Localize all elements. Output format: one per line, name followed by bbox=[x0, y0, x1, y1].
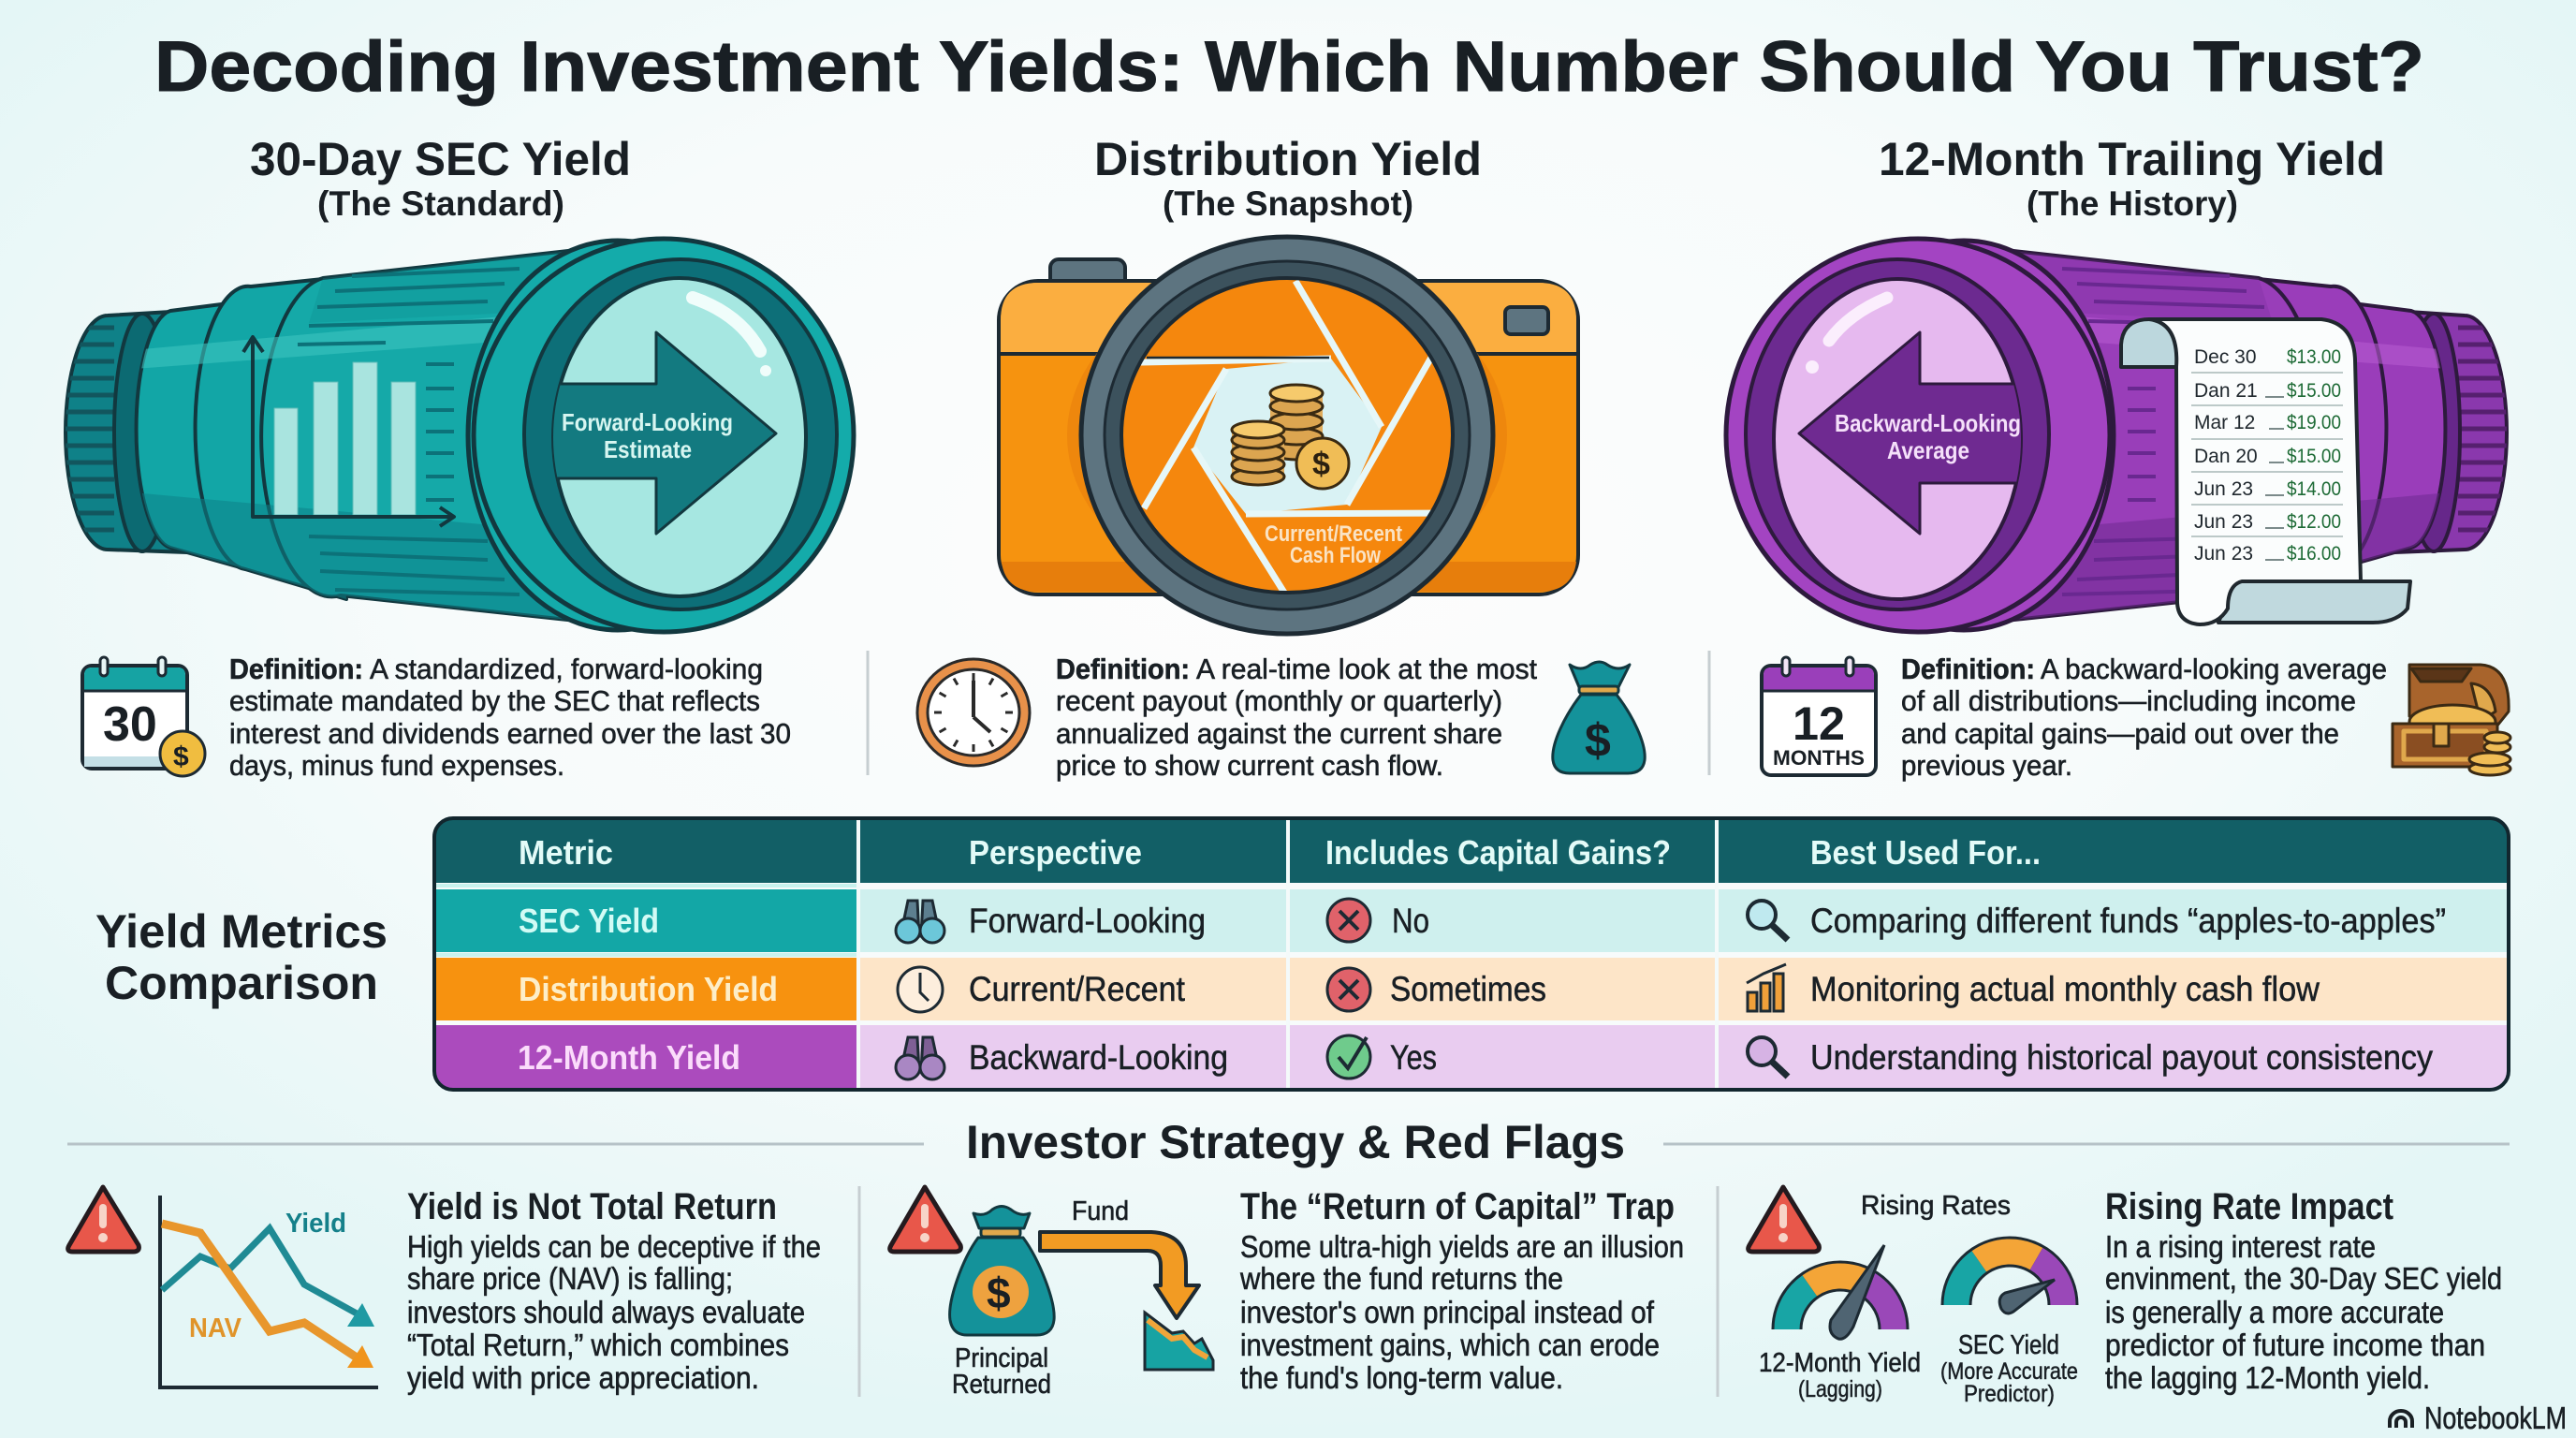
chart: eroding value bbox=[1145, 1313, 1213, 1370]
row: 12-Month Yield: Backward-Looking bbox=[969, 1038, 1228, 1077]
text: 12-month definition bbox=[1901, 653, 2387, 782]
icon: binoculars bbox=[896, 901, 944, 943]
illustration: purple telescope bbox=[1726, 239, 2507, 632]
text: yield is not total return: yield with price appreciation. bbox=[407, 1360, 759, 1395]
illustration: teal telescope bbox=[66, 239, 854, 632]
gauge: SEC yield bbox=[1956, 1252, 2063, 1313]
row: 12-Month Yield: Understanding historical payout consistency bbox=[1810, 1038, 2433, 1077]
chart: yield vs NAV bbox=[160, 1196, 378, 1387]
receipt: $15.00 bbox=[2287, 446, 2341, 467]
heading: yield metrics comparison: Yield Metrics bbox=[95, 905, 388, 958]
heading: 30-Day SEC Yield bbox=[250, 133, 631, 223]
icon: 30 day calendar: 30 bbox=[103, 697, 157, 752]
text: 12-month definition: A backward-looking average bbox=[2041, 653, 2387, 685]
text: rising rate impact: In a rising interest rate bbox=[2105, 1229, 2376, 1264]
bar chart on telescope bbox=[243, 337, 454, 526]
icon: coin stacks bbox=[1232, 385, 1349, 489]
receipt: Dan 20 bbox=[2194, 446, 2258, 467]
strategy 3: rising rate impact: Predictor) bbox=[1964, 1381, 2055, 1407]
icon: warning bbox=[890, 1187, 960, 1252]
text: 12-month definition: and capital gains—paid out over the bbox=[1901, 717, 2339, 750]
table header row: Best Used For... bbox=[1810, 833, 2041, 872]
row: Distribution Yield: Distribution Yield bbox=[519, 970, 778, 1008]
row: SEC Yield: No bbox=[1392, 902, 1429, 940]
strategy 2: return of capital trap: Returned bbox=[952, 1370, 1051, 1400]
text: return of capital: Some ultra-high yields are an illusion bbox=[1240, 1229, 1684, 1264]
icon: no bbox=[1327, 899, 1370, 942]
text: yield is not total return: High yields can be deceptive if the bbox=[407, 1229, 821, 1264]
table header row: Metric bbox=[519, 833, 613, 872]
row: Distribution Yield: Sometimes bbox=[1390, 970, 1546, 1008]
icon: sometimes bbox=[1327, 968, 1370, 1011]
arrow: fund down bbox=[1040, 1232, 1199, 1318]
heading: 30-Day SEC Yield: 30-Day SEC Yield bbox=[250, 133, 631, 185]
icon: 12 months calendar bbox=[1762, 657, 1876, 775]
receipt: Jun 23 bbox=[2194, 511, 2253, 533]
strategy 3: rising rate impact: (More Accurate bbox=[1940, 1358, 2078, 1385]
receipt bbox=[2121, 319, 2410, 624]
heading: 12-Month Trailing Yield bbox=[1879, 133, 2385, 223]
text: 12-month definition: previous year. bbox=[1901, 749, 2072, 782]
text: rising rate impact bbox=[2105, 1186, 2502, 1395]
text: yield is not total return: Yield is Not Total Return bbox=[407, 1186, 777, 1227]
icon: 30 day calendar bbox=[82, 657, 205, 776]
comparison table bbox=[434, 818, 2509, 1090]
chart: yield vs NAV: Yield bbox=[285, 1209, 346, 1239]
row: Distribution Yield: Current/Recent bbox=[969, 970, 1186, 1008]
text: distribution definition bbox=[1056, 653, 1537, 782]
text: distribution definition: A real-time look at the most bbox=[1196, 653, 1537, 685]
illustration: purple telescope: Backward-Looking bbox=[1835, 409, 2021, 437]
text: 12-month definition: of all distributions—including income bbox=[1901, 684, 2356, 717]
table header row: Perspective bbox=[969, 833, 1142, 872]
icon: money bag: $ bbox=[1585, 714, 1611, 767]
icon: warning bbox=[1749, 1187, 1819, 1252]
icon: binoculars purple bbox=[896, 1037, 944, 1079]
icon: 30 day calendar: $ bbox=[173, 741, 189, 772]
text: yield is not total return: share price (NAV) is falling; bbox=[407, 1261, 733, 1296]
receipt: $13.00 bbox=[2287, 346, 2341, 368]
text: 30-day definition: days, minus fund expenses. bbox=[229, 749, 564, 782]
text: 30-day definition: A standardized, forward-looking bbox=[370, 653, 763, 685]
strategy 2: return of capital trap bbox=[890, 1186, 1684, 1400]
strategy 3: rising rate impact: 12-Month Yield bbox=[1759, 1348, 1921, 1378]
icon: magnifier purple bbox=[1748, 1037, 1788, 1077]
icon: warning bbox=[68, 1187, 139, 1252]
text: distribution definition: recent payout (monthly or quarterly) bbox=[1056, 684, 1502, 717]
strategy 2: return of capital trap: Principal bbox=[955, 1343, 1048, 1373]
heading: 30-Day SEC Yield: (The Standard) bbox=[317, 184, 564, 223]
illustration: purple telescope: Average bbox=[1887, 436, 1969, 464]
icon: clock bbox=[917, 659, 1030, 766]
receipt: Mar 12 bbox=[2194, 412, 2255, 433]
text: rising rate impact: predictor of future income than bbox=[2105, 1328, 2485, 1362]
text: 30-day definition: interest and dividends earned over the last 30 bbox=[229, 717, 791, 750]
heading: 12-Month Trailing Yield: 12-Month Trailing Yield bbox=[1879, 133, 2385, 185]
icon: magnifier bbox=[1748, 901, 1788, 940]
text: 12-month definition: Definition: bbox=[1901, 653, 2035, 685]
gauge: 12-month lagging bbox=[1787, 1245, 1894, 1339]
receipt: Dec 30 bbox=[2194, 346, 2257, 368]
text: yield is not total return: “Total Return,” which combines bbox=[407, 1328, 789, 1362]
text: return of capital: investment gains, which can erode bbox=[1240, 1328, 1660, 1362]
heading: yield metrics comparison: Comparison bbox=[105, 957, 378, 1009]
text: rising rate impact: the lagging 12-Month yield. bbox=[2105, 1360, 2430, 1395]
illustration: teal telescope: Forward-Looking bbox=[562, 408, 733, 436]
strategy 2: return of capital trap: Fund bbox=[1072, 1196, 1129, 1226]
icon: 12 months calendar: MONTHS bbox=[1773, 746, 1865, 770]
aperture blades bbox=[1121, 278, 1453, 593]
text: rising rate impact: envinment, the 30-Day SEC yield bbox=[2105, 1261, 2502, 1296]
text: yield is not total return: investors should always evaluate bbox=[407, 1295, 805, 1329]
heading: investor strategy: Investor Strategy & Red Flags bbox=[966, 1116, 1625, 1168]
icon: clock small bbox=[898, 967, 943, 1012]
text: return of capital bbox=[1239, 1186, 1684, 1395]
arrow: backward-looking bbox=[1799, 298, 2036, 534]
icon: mini growth chart bbox=[1747, 964, 1786, 1011]
table header row bbox=[519, 833, 2041, 872]
text: return of capital: The “Return of Capital” Trap bbox=[1240, 1186, 1675, 1227]
text: distribution definition: price to show current cash flow. bbox=[1056, 749, 1443, 782]
strategy 3: rising rate impact: (Lagging) bbox=[1798, 1376, 1882, 1402]
illustration: orange camera bbox=[999, 237, 1578, 634]
text: return of capital: the fund's long-term value. bbox=[1240, 1360, 1563, 1395]
text: yield is not total return bbox=[407, 1186, 821, 1395]
icon: principal money bag: $ bbox=[987, 1269, 1011, 1317]
receipt: Jun 23 bbox=[2194, 478, 2253, 500]
strategy 3: rising rate impact: SEC Yield bbox=[1958, 1330, 2059, 1360]
text: rising rate impact: is generally a more accurate bbox=[2105, 1295, 2444, 1329]
heading: Distribution Yield: Distribution Yield bbox=[1094, 133, 1482, 185]
illustration: orange camera: Cash Flow bbox=[1290, 543, 1381, 568]
chart: yield vs NAV: NAV bbox=[189, 1313, 242, 1343]
text: distribution definition: annualized against the current share bbox=[1056, 717, 1502, 750]
row: 12-Month Yield: Yes bbox=[1390, 1038, 1437, 1077]
text: 30-day definition: estimate mandated by the SEC that reflects bbox=[229, 684, 760, 717]
title: Decoding Investment Yields: Which Number Should You Trust? bbox=[154, 27, 2424, 107]
illustration: orange camera: $ bbox=[1312, 447, 1330, 482]
row: Distribution Yield: Monitoring actual monthly cash flow bbox=[1810, 970, 2320, 1008]
text: 30-day definition: Definition: bbox=[229, 653, 363, 685]
receipt: $12.00 bbox=[2287, 511, 2341, 533]
arrow: forward-looking bbox=[524, 298, 776, 534]
table header row: Includes Capital Gains? bbox=[1325, 833, 1671, 872]
receipt: $14.00 bbox=[2287, 478, 2341, 500]
strategy 3: rising rate impact: Rising Rates bbox=[1861, 1191, 2011, 1221]
icon: yes bbox=[1327, 1035, 1370, 1078]
receipt: $15.00 bbox=[2287, 380, 2341, 402]
row: SEC Yield bbox=[519, 899, 2446, 943]
receipt: Jun 23 bbox=[2194, 543, 2253, 565]
receipt: $16.00 bbox=[2287, 543, 2341, 565]
heading: yield metrics comparison bbox=[95, 905, 388, 1009]
row: SEC Yield: Forward-Looking bbox=[969, 902, 1206, 940]
icon: treasure chest bbox=[2393, 665, 2510, 775]
text: 30-day definition bbox=[229, 653, 791, 782]
illustration: orange camera: Current/Recent bbox=[1265, 521, 1402, 547]
heading: Distribution Yield: (The Snapshot) bbox=[1163, 184, 1413, 223]
heading: Distribution Yield bbox=[1094, 133, 1482, 223]
row: Distribution Yield bbox=[519, 964, 2320, 1012]
row: 12-Month Yield: 12-Month Yield bbox=[518, 1038, 740, 1077]
illustration: teal telescope: Estimate bbox=[604, 435, 692, 463]
receipt: $19.00 bbox=[2287, 412, 2341, 433]
text: distribution definition: Definition: bbox=[1056, 653, 1190, 685]
text: return of capital: investor's own principal instead of bbox=[1240, 1295, 1655, 1329]
row: SEC Yield: SEC Yield bbox=[519, 902, 659, 940]
heading: 12-Month Trailing Yield: (The History) bbox=[2027, 184, 2238, 223]
text: rising rate impact: Rising Rate Impact bbox=[2105, 1186, 2393, 1227]
text: return of capital: where the fund returns the bbox=[1239, 1261, 1563, 1296]
strategy 3: rising rate impact bbox=[1749, 1186, 2502, 1407]
row: SEC Yield: Comparing different funds “apples-to-apples” bbox=[1810, 902, 2446, 940]
icon: money bag bbox=[1553, 662, 1645, 773]
icon: 12 months calendar: 12 bbox=[1793, 697, 1845, 750]
icon: principal money bag bbox=[950, 1206, 1054, 1335]
receipt: Dan 21 bbox=[2194, 380, 2258, 402]
row: 12-Month Yield bbox=[518, 1035, 2433, 1079]
strategy 1: yield vs total return bbox=[68, 1186, 821, 1395]
